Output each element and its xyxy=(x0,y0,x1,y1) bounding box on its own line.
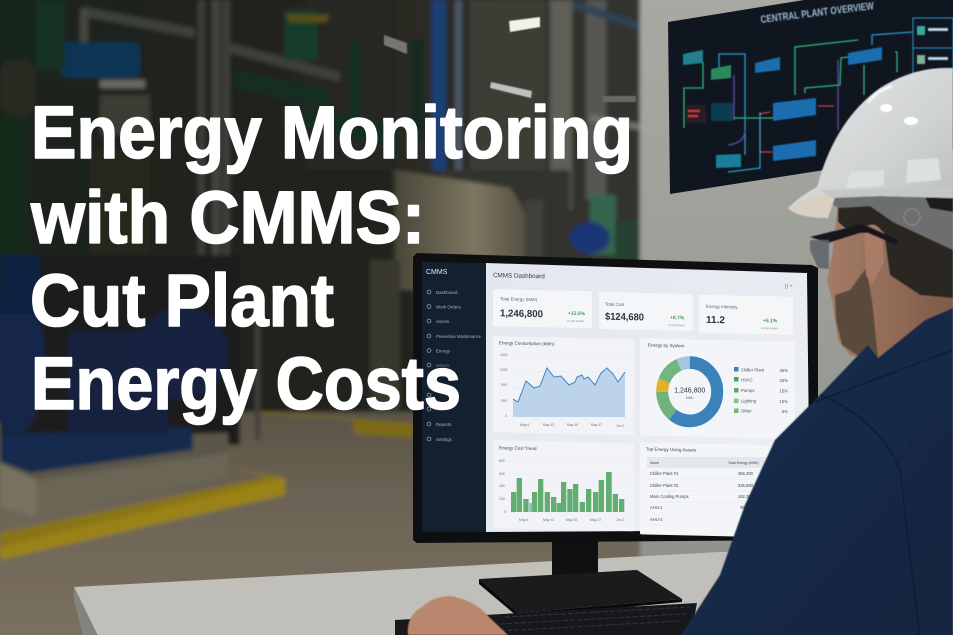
assets table: 76,400 xyxy=(740,517,754,522)
area chart: May 27 xyxy=(591,423,602,427)
monitor: Work Orders xyxy=(436,304,462,310)
bar chart: 400 xyxy=(499,484,505,488)
dashboard cards and text: CMMS Dashboard xyxy=(493,272,545,280)
donut chart: kWh xyxy=(686,396,694,400)
ear xyxy=(864,225,884,285)
bar chart: May 27 xyxy=(590,518,601,522)
donut legend: Pumps xyxy=(741,388,754,393)
energy KPI card xyxy=(493,289,592,328)
monitor xyxy=(413,253,818,617)
area chart: May 6 xyxy=(520,423,529,427)
dashboard cards and text: Energy by System xyxy=(648,343,685,348)
area chart: Jun 2 xyxy=(616,424,624,428)
bar chart: Jun 2 xyxy=(616,518,624,522)
pipe network xyxy=(684,32,913,172)
bar chart: 800 xyxy=(499,459,505,463)
safety glasses xyxy=(810,224,898,269)
monitor: Reports xyxy=(436,422,452,427)
floor xyxy=(0,412,645,635)
hair xyxy=(838,205,953,298)
cost KPI card xyxy=(599,292,693,331)
assets table: AHU-1 xyxy=(650,505,663,510)
desk xyxy=(74,552,780,635)
engineer xyxy=(678,68,953,635)
monitor: Assets xyxy=(436,319,450,324)
donut legend: 25% xyxy=(779,378,788,383)
title: Energy Monitoring xyxy=(31,91,633,174)
energy KPI card: 1,246,800 xyxy=(500,308,543,320)
cost KPI card: Total Cost xyxy=(605,302,625,307)
assets table: Main Cooling Pumps xyxy=(650,494,689,499)
donut legend xyxy=(734,367,788,414)
bar chart: 0 xyxy=(504,510,506,514)
assets table: 162,300 xyxy=(738,494,754,499)
bar chart: May 6 xyxy=(519,518,528,522)
intensity KPI card: vs last month xyxy=(761,326,778,330)
left dark fill xyxy=(0,255,240,445)
helmet suspension band xyxy=(823,195,953,250)
donut chart xyxy=(662,363,717,421)
dashboard cards and text: Energy Cost Trend xyxy=(499,445,537,451)
dark machinery behind xyxy=(240,290,415,412)
energy KPI card: vs last month xyxy=(567,319,584,323)
bar chart: May 13 xyxy=(543,518,554,522)
area chart: 1500 xyxy=(500,353,508,357)
blue pump unit xyxy=(0,255,229,473)
assets table xyxy=(647,457,782,525)
monitor: Preventive Maintenance xyxy=(436,334,482,339)
assets table: Total Energy (kWh) xyxy=(728,461,759,465)
steel pipes xyxy=(80,0,640,270)
dashboard panel xyxy=(486,263,810,532)
keyboard xyxy=(395,603,697,635)
monitor frame xyxy=(413,253,818,543)
dashboard cards and text: ▯ ◔ xyxy=(785,284,792,290)
donut chart: 1,246,800 xyxy=(674,388,705,394)
monitor: Meters xyxy=(436,363,450,368)
area chart: 500 xyxy=(501,383,507,387)
assets table: Asset xyxy=(650,461,659,465)
bar chart: 200 xyxy=(499,497,505,501)
area chart: 0 xyxy=(505,414,507,418)
sidebar xyxy=(422,262,486,532)
cost KPI card: +8.7% xyxy=(670,315,685,321)
monitor: Settings xyxy=(436,437,453,442)
bar chart xyxy=(499,459,627,522)
heat exchanger tank xyxy=(395,170,540,350)
chart cards xyxy=(493,336,634,435)
dashboard cards and text: Top Energy Using Assets xyxy=(646,447,697,453)
assets table: 90,700 xyxy=(740,505,754,510)
beard xyxy=(835,268,878,358)
green pipes xyxy=(0,0,616,260)
monitor: CMMS xyxy=(426,269,448,276)
assets table: 325,680 xyxy=(738,483,754,488)
dashboard cards and text: Energy Consumption (kWh) xyxy=(499,340,555,347)
back yellow curb xyxy=(255,411,413,438)
donut legend: Chiller Plant xyxy=(741,368,765,372)
title: Cut Plant xyxy=(30,259,334,342)
title: with CMMS: xyxy=(30,176,425,259)
monitor: Dashboard xyxy=(436,290,458,295)
cost KPI card: vs last month xyxy=(668,323,685,327)
area chart: 1000 xyxy=(500,368,508,372)
pedestal xyxy=(0,433,228,517)
donut legend: 15% xyxy=(779,388,788,394)
back wall xyxy=(640,0,953,635)
dashboard cards and text xyxy=(493,272,795,538)
donut legend: Other xyxy=(741,408,752,414)
area chart: May 20 xyxy=(567,423,578,427)
wall screen: central plant overview xyxy=(668,0,953,194)
blue pipes xyxy=(432,0,446,170)
cost KPI card: $124,680 xyxy=(605,312,644,323)
assets table: Chiller Plant #1 xyxy=(650,471,679,476)
intensity KPI card: Energy Intensity xyxy=(706,304,738,310)
monitor: Energy xyxy=(436,348,451,354)
donut legend: HVAC xyxy=(741,378,753,382)
area chart: May 13 xyxy=(543,423,554,427)
intensity KPI card xyxy=(699,295,793,335)
bar chart: 600 xyxy=(499,472,505,476)
donut legend: 10% xyxy=(779,399,788,404)
donut legend: 5% xyxy=(782,409,788,414)
energy KPI card: +12.5% xyxy=(568,311,586,317)
yellow floor curb xyxy=(0,467,285,560)
bar chart: May 20 xyxy=(566,518,577,522)
ceiling lights xyxy=(384,17,636,102)
title xyxy=(30,91,633,425)
intensity KPI card: +5.1% xyxy=(763,318,778,324)
intensity KPI card: 11.2 xyxy=(706,315,725,326)
title: Energy Costs xyxy=(31,342,461,425)
equipment blocks xyxy=(683,50,703,65)
area chart: 250 xyxy=(501,399,507,403)
shirt xyxy=(678,308,953,635)
energy KPI card: Total Energy (kWh) xyxy=(500,296,538,302)
side status panels xyxy=(913,18,953,48)
hard hat xyxy=(788,68,953,218)
monitor stand xyxy=(552,540,598,586)
area chart xyxy=(500,353,626,428)
small blue pump xyxy=(570,222,610,254)
donut legend: 45% xyxy=(779,368,788,373)
donut legend: Lighting xyxy=(741,398,757,404)
neck and face xyxy=(827,205,953,365)
assets table: 456,300 xyxy=(738,471,754,476)
assets table: Chiller Plant #2 xyxy=(650,483,679,488)
hand xyxy=(408,596,508,635)
assets table: AHU-2 xyxy=(650,517,663,522)
flanges and clutter xyxy=(0,60,36,115)
